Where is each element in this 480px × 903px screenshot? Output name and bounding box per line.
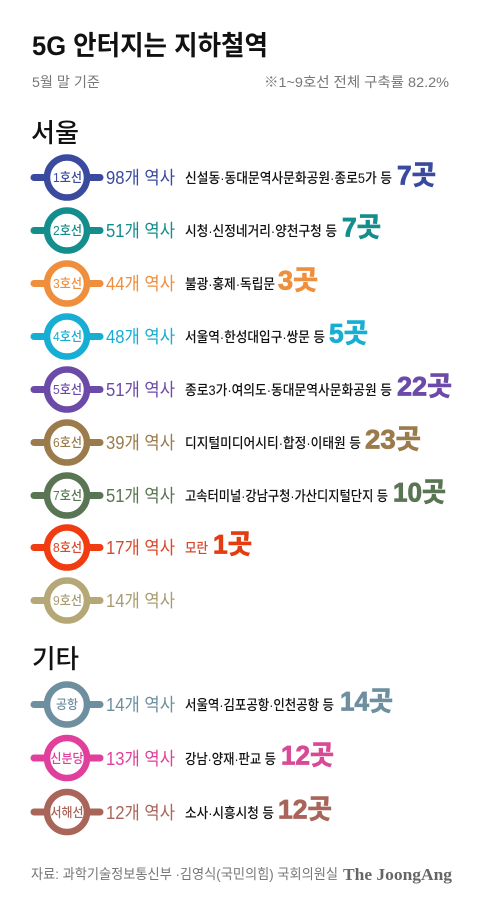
- row: line 1: 신설동·동대문역사문화공원·종로5가 등: [185, 170, 392, 186]
- row: airport line: [34, 684, 393, 724]
- row: line 1: [34, 158, 436, 198]
- row: airport line: 14곳: [340, 686, 393, 716]
- row: line 4: [34, 316, 368, 356]
- note: total build rate: ※1~9호선 전체 구축률 82.2%: [264, 74, 449, 90]
- row: line 7: [34, 476, 446, 516]
- heading: others: 기타: [32, 644, 79, 674]
- row: line 5: 종로3가·여의도·동대문역사문화공원 등: [185, 382, 392, 398]
- row: line 5: [34, 370, 452, 410]
- row: line 6: 23곳: [365, 424, 421, 454]
- row: Seohae line: 서해선: [50, 805, 84, 820]
- row: line 8: 17개 역사: [106, 538, 175, 558]
- row: line 4: 4호선: [53, 329, 82, 344]
- row: line 7: 10곳: [393, 478, 446, 508]
- row: line 8: 모란: [185, 540, 208, 556]
- row: line 6: 39개 역사: [106, 433, 175, 453]
- subtitle: date basis: 5월 말 기준: [32, 74, 100, 90]
- title: 5G 안터지는 지하철역: [32, 31, 268, 61]
- row: line 4: 서울역·한성대입구·쌍문 등: [185, 329, 325, 345]
- heading: Seoul: 서울: [31, 118, 79, 148]
- row: line 6: 디지털미디어시티·합정·이태원 등: [185, 435, 361, 451]
- row: line 7: 고속터미널·강남구청·가산디지털단지 등: [185, 488, 388, 504]
- row: line 9: 14개 역사: [106, 591, 175, 611]
- row: line 3: 3곳: [278, 266, 318, 296]
- row: line 5: 22곳: [397, 372, 452, 402]
- row: line 6: [34, 422, 421, 462]
- row: Seohae line: 12곳: [278, 794, 332, 824]
- row: line 9: [34, 580, 175, 620]
- row: line 2: [34, 210, 381, 250]
- row: line 2: 2호선: [53, 223, 82, 238]
- row: line 2: 51개 역사: [106, 221, 175, 241]
- source line: 자료: 과학기술정보통신부 ·김영식(국민의힘) 국회의원실: [31, 866, 338, 882]
- row: Sinbundang line: 신분당: [50, 751, 84, 766]
- row: line 8: [34, 528, 252, 568]
- row: line 8: 8호선: [53, 540, 82, 555]
- row: line 3: 44개 역사: [106, 274, 175, 294]
- row: Sinbundang line: 강남·양재·판교 등: [185, 751, 276, 767]
- row: line 6: 6호선: [53, 435, 82, 450]
- row: Seohae line: 12개 역사: [106, 803, 175, 823]
- row: line 1: 98개 역사: [106, 168, 175, 188]
- row: airport line: 공항: [56, 697, 78, 712]
- logo: The JoongAng: The JoongAng: [343, 865, 453, 884]
- row: line 8: 1곳: [213, 530, 252, 560]
- row: Sinbundang line: 12곳: [281, 740, 334, 770]
- row: line 9: 9호선: [53, 593, 82, 608]
- row: line 4: 48개 역사: [106, 327, 175, 347]
- row: line 1: 7곳: [397, 160, 436, 190]
- row: line 2: 7곳: [342, 212, 381, 242]
- row: airport line: 서울역·김포공항·인천공항 등: [185, 697, 334, 713]
- row: line 2: 시청·신정네거리·양천구청 등: [185, 223, 337, 239]
- row: line 4: 5곳: [329, 318, 368, 348]
- row: Sinbundang line: [34, 738, 334, 778]
- row: Seohae line: 소사·시흥시청 등: [185, 805, 274, 821]
- row: line 7: 51개 역사: [106, 486, 175, 506]
- row: Seohae line: [34, 792, 332, 832]
- row: line 5: 5호선: [53, 382, 82, 397]
- row: line 3: 3호선: [53, 276, 82, 291]
- row: line 3: 불광·홍제·독립문: [185, 276, 275, 292]
- row: line 5: 51개 역사: [106, 380, 175, 400]
- row: line 1: 1호선: [53, 170, 82, 185]
- row: Sinbundang line: 13개 역사: [106, 749, 175, 769]
- row: line 7: 7호선: [53, 488, 82, 503]
- row: airport line: 14개 역사: [106, 695, 175, 715]
- row: line 3: [34, 264, 318, 304]
